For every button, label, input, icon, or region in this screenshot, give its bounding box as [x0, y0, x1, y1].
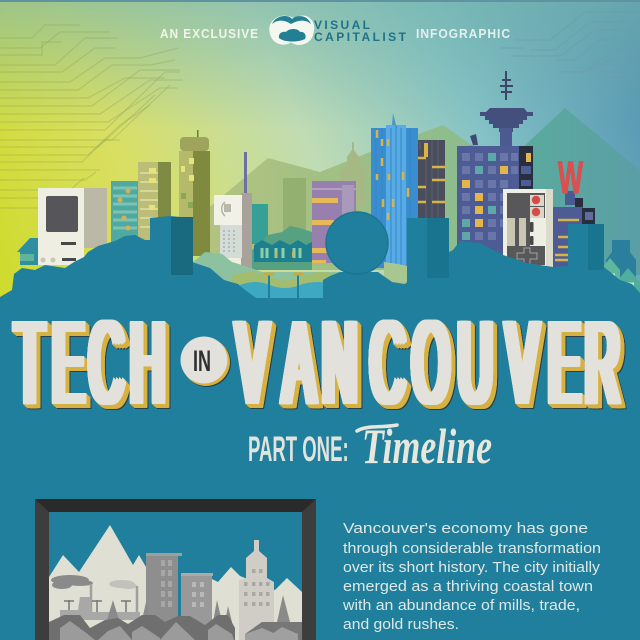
- frame border: [35, 499, 316, 640]
- building: harbour centre tower: [457, 71, 533, 268]
- title: tech: TECH: [11, 297, 160, 428]
- pale art deco tower: [239, 540, 274, 640]
- grey tower two: [181, 573, 213, 626]
- background sky: [0, 0, 640, 300]
- foreground skyline silhouette: [0, 212, 640, 300]
- icon: brick mobile phone: [213, 152, 252, 268]
- icon: green house left: [17, 238, 38, 265]
- mountains: [200, 108, 640, 275]
- teal panel: [0, 298, 640, 640]
- pine trees: [107, 595, 290, 622]
- title: vancouver: VANCOUVER: [232, 297, 615, 428]
- infographic label: INFOGRAPHIC: [416, 27, 511, 41]
- building: teal apartment: [111, 181, 138, 245]
- background towers: [252, 142, 366, 244]
- intro paragraph: [342, 520, 601, 633]
- sign: W letter: W: [558, 152, 583, 203]
- logo: visual capitalist: [270, 16, 407, 44]
- intro paragraph: with an abundance of mills, trade,: [342, 597, 580, 614]
- intro paragraph: through considerable transformation: [343, 540, 601, 557]
- trees and houses row: [252, 226, 312, 270]
- circuit lines left: [0, 25, 183, 208]
- title: in badge: [180, 336, 231, 387]
- logo: visual capitalist: CAPITALIST: [314, 30, 407, 44]
- picture frame illustration: [35, 499, 316, 640]
- icon: game controller: [503, 189, 553, 267]
- building: dark striped tower: [418, 140, 445, 225]
- building: observation tower: [179, 130, 210, 256]
- subtitle: part one: PART ONE:: [248, 430, 349, 468]
- building: woodwards W tower: [553, 152, 595, 267]
- intro paragraph: Vancouver's economy has gone: [343, 520, 588, 537]
- grey tower one: [146, 553, 182, 623]
- subtitle: timeline: [357, 418, 492, 474]
- subtitle: timeline: Timeline: [362, 418, 492, 474]
- smokestacks and poles: [91, 584, 137, 618]
- intro paragraph: and gold rushes.: [343, 616, 459, 633]
- title: in badge: IN: [193, 345, 211, 378]
- building: purple office: [312, 181, 356, 263]
- logo: visual capitalist: VISUAL: [314, 18, 370, 32]
- row of houses: [49, 615, 235, 640]
- intro paragraph: emerged as a thriving coastal town: [343, 578, 593, 595]
- icon: macintosh computer: [38, 188, 107, 265]
- frame top rail: [35, 499, 316, 512]
- houses far right: [602, 240, 640, 295]
- waterfront waves and lamps: [193, 252, 407, 300]
- intro paragraph: over its short history. The city initially: [343, 559, 601, 576]
- circuit lines right: [500, 12, 640, 82]
- building: olive apartment: [138, 162, 171, 240]
- snowy mountains: [49, 525, 146, 640]
- an exclusive label: AN EXCLUSIVE: [160, 27, 259, 41]
- smoke clouds: [51, 575, 93, 589]
- building: blue glass tower: [371, 113, 418, 268]
